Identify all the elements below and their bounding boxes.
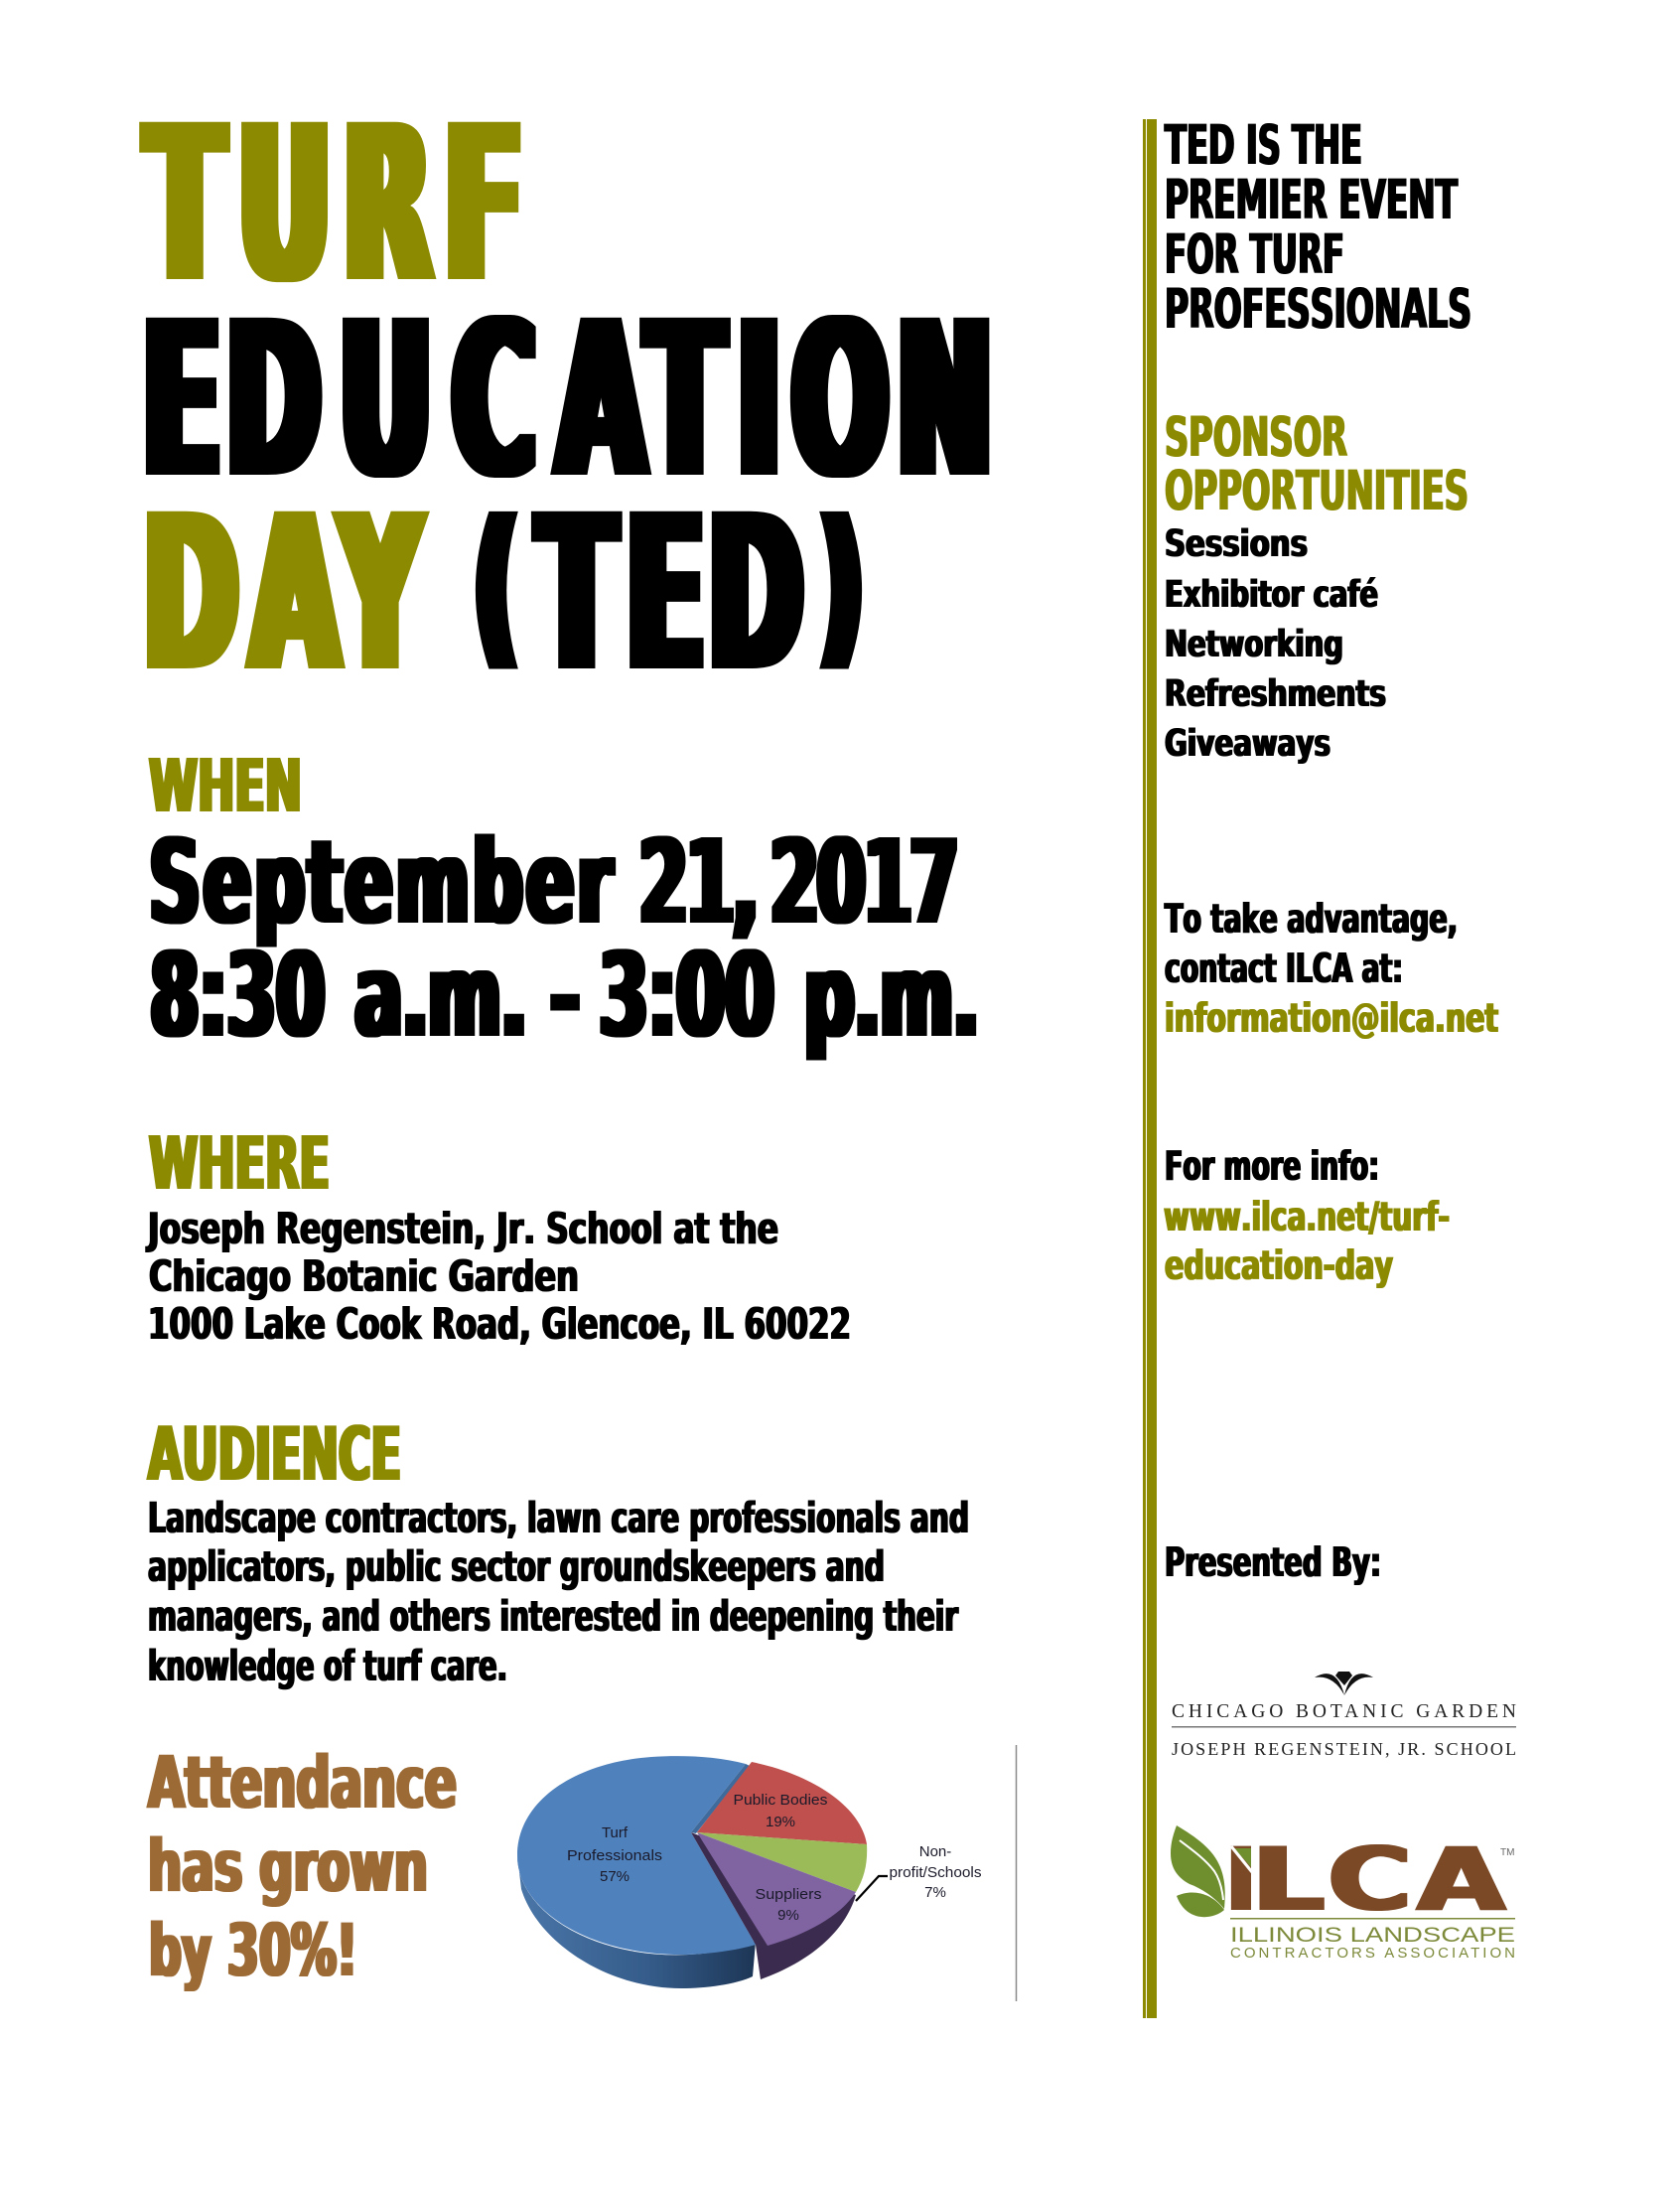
sidebar: contact: To take advantage, — [1165, 895, 1458, 943]
title line: TURF: TURF — [147, 78, 522, 330]
icon: leaves — [1171, 1825, 1225, 1917]
sidebar: sponsor opportunities list: Sessions — [1165, 522, 1308, 565]
sidebar: sponsor opportunities list: Exhibitor café — [1165, 573, 1378, 616]
audience text: applicators, public sector groundskeepers and — [148, 1542, 885, 1592]
slice: turf professionals — [517, 1756, 756, 1955]
sidebar: sponsor opportunities heading: OPPORTUNITIES — [1165, 459, 1469, 522]
label: public bodies — [733, 1792, 828, 1830]
sidebar: contact: contact ILCA at: — [1165, 945, 1403, 992]
section: where — [146, 1121, 851, 1350]
title — [144, 78, 992, 719]
sidebar: more info — [1164, 1142, 1450, 1289]
audience text — [148, 1494, 969, 1691]
logo: Chicago Botanic Garden: CHICAGO BOTANIC GARDEN — [1172, 1701, 1516, 1722]
sidebar: more info: www.ilca.net/turf- — [1164, 1193, 1450, 1240]
heading: where: WHERE — [149, 1121, 330, 1207]
address text: 1000 Lake Cook Road, Glencoe, IL 60022 — [148, 1299, 851, 1350]
logo: Chicago Botanic Garden: JOSEPH REGENSTEIN, JR. SCHOOL — [1172, 1739, 1516, 1759]
section: when — [149, 744, 979, 1064]
label: turf professionals: 57% — [600, 1868, 630, 1885]
sidebar: sponsor opportunities list: Networking — [1165, 623, 1343, 665]
label: public bodies: 19% — [766, 1814, 795, 1830]
address text — [146, 1204, 851, 1350]
heading: when: WHEN — [149, 744, 302, 829]
callout: attendance growth: has grown — [148, 1824, 428, 1909]
label: non-profit/schools: 7% — [924, 1884, 946, 1901]
callout: attendance growth — [148, 1741, 457, 1993]
slice side: suppliers — [691, 1832, 856, 1979]
icon: botanic garden bird mark — [1315, 1672, 1373, 1695]
sidebar: more info: education-day — [1165, 1241, 1393, 1289]
audience text: knowledge of turf care. — [148, 1642, 507, 1691]
sidebar: contact: information@ilca.net — [1165, 994, 1498, 1042]
label: non-profit/schools — [890, 1843, 981, 1901]
title line: DAY: DAY — [145, 468, 422, 719]
sidebar: headline: TED IS THE — [1165, 113, 1362, 177]
title line: (TED): ) — [820, 483, 862, 688]
slice: suppliers — [697, 1832, 856, 1946]
logo: Chicago Botanic Garden — [1172, 1672, 1516, 1759]
leader line — [856, 1876, 888, 1901]
label: turf professionals — [567, 1824, 662, 1885]
sidebar: headline — [1165, 113, 1471, 341]
sidebar: contact — [1165, 895, 1498, 1042]
address text: Joseph Regenstein, Jr. School at the — [146, 1204, 778, 1254]
logo: ILCA: TM — [1500, 1847, 1514, 1858]
label: non-profit/schools: profit/Schools — [890, 1864, 981, 1881]
slice edge: turf professionals — [691, 1764, 750, 1833]
title line: (TED): ( — [476, 483, 517, 688]
label: suppliers — [755, 1886, 822, 1924]
callout: attendance growth: by 30%! — [149, 1909, 357, 1993]
audience text: managers, and others interested in deepening their — [148, 1592, 959, 1642]
sidebar: sponsor opportunities list: Refreshments — [1165, 672, 1386, 715]
sidebar: headline: FOR TURF — [1165, 222, 1344, 286]
heading: audience: AUDIENCE — [148, 1410, 401, 1498]
logo: ILCA: ILLINOIS LANDSCAPE — [1230, 1924, 1515, 1947]
label: suppliers: Suppliers — [755, 1886, 822, 1903]
sidebar: headline: PROFESSIONALS — [1165, 277, 1471, 341]
label: turf professionals: Turf — [602, 1824, 629, 1841]
sidebar: sponsor opportunities list: Giveaways — [1165, 722, 1330, 765]
sidebar: sponsor opportunities heading: SPONSOR — [1165, 405, 1347, 469]
date: 21, — [639, 814, 778, 950]
slice: public bodies — [697, 1762, 867, 1844]
date — [150, 814, 956, 950]
slice: non-profit/schools — [697, 1832, 867, 1892]
time: a.m. — [355, 928, 551, 1064]
time: 8:30 — [150, 928, 350, 1064]
time: - — [550, 928, 604, 1064]
date: September — [150, 814, 643, 950]
callout: attendance growth: Attendance — [148, 1741, 457, 1825]
sidebar: presented by: Presented By: — [1165, 1538, 1381, 1586]
title line: (TED): TED — [538, 468, 802, 719]
sidebar: sponsor opportunities heading — [1165, 405, 1469, 522]
sidebar: more info: For more info: — [1165, 1142, 1379, 1190]
time: 3:00 — [600, 928, 798, 1064]
wordmark: ILCA — [1223, 1829, 1505, 1932]
label: non-profit/schools: Non- — [919, 1843, 951, 1860]
pie chart: audience breakdown — [517, 1756, 981, 1988]
sidebar: sponsor opportunities list — [1165, 522, 1386, 765]
address text: Chicago Botanic Garden — [149, 1251, 579, 1302]
audience text: Landscape contractors, lawn care professionals and — [148, 1494, 969, 1543]
logo: ILCA — [1171, 1825, 1515, 1962]
time: p.m. — [804, 928, 979, 1064]
section: audience — [148, 1410, 969, 1691]
sidebar divider bar — [1143, 119, 1157, 2018]
slice side: turf professionals — [517, 1855, 756, 1988]
time — [150, 928, 979, 1064]
label: public bodies: Public Bodies — [733, 1792, 828, 1809]
title line: EDUCATION: EDUCATION — [144, 274, 992, 525]
sidebar: headline: PREMIER EVENT — [1165, 168, 1458, 231]
label: turf professionals: Professionals — [567, 1847, 662, 1864]
logo: ILCA: CONTRACTORS ASSOCIATION — [1230, 1945, 1515, 1962]
label: suppliers: 9% — [777, 1907, 799, 1924]
date: 2017 — [770, 814, 956, 950]
